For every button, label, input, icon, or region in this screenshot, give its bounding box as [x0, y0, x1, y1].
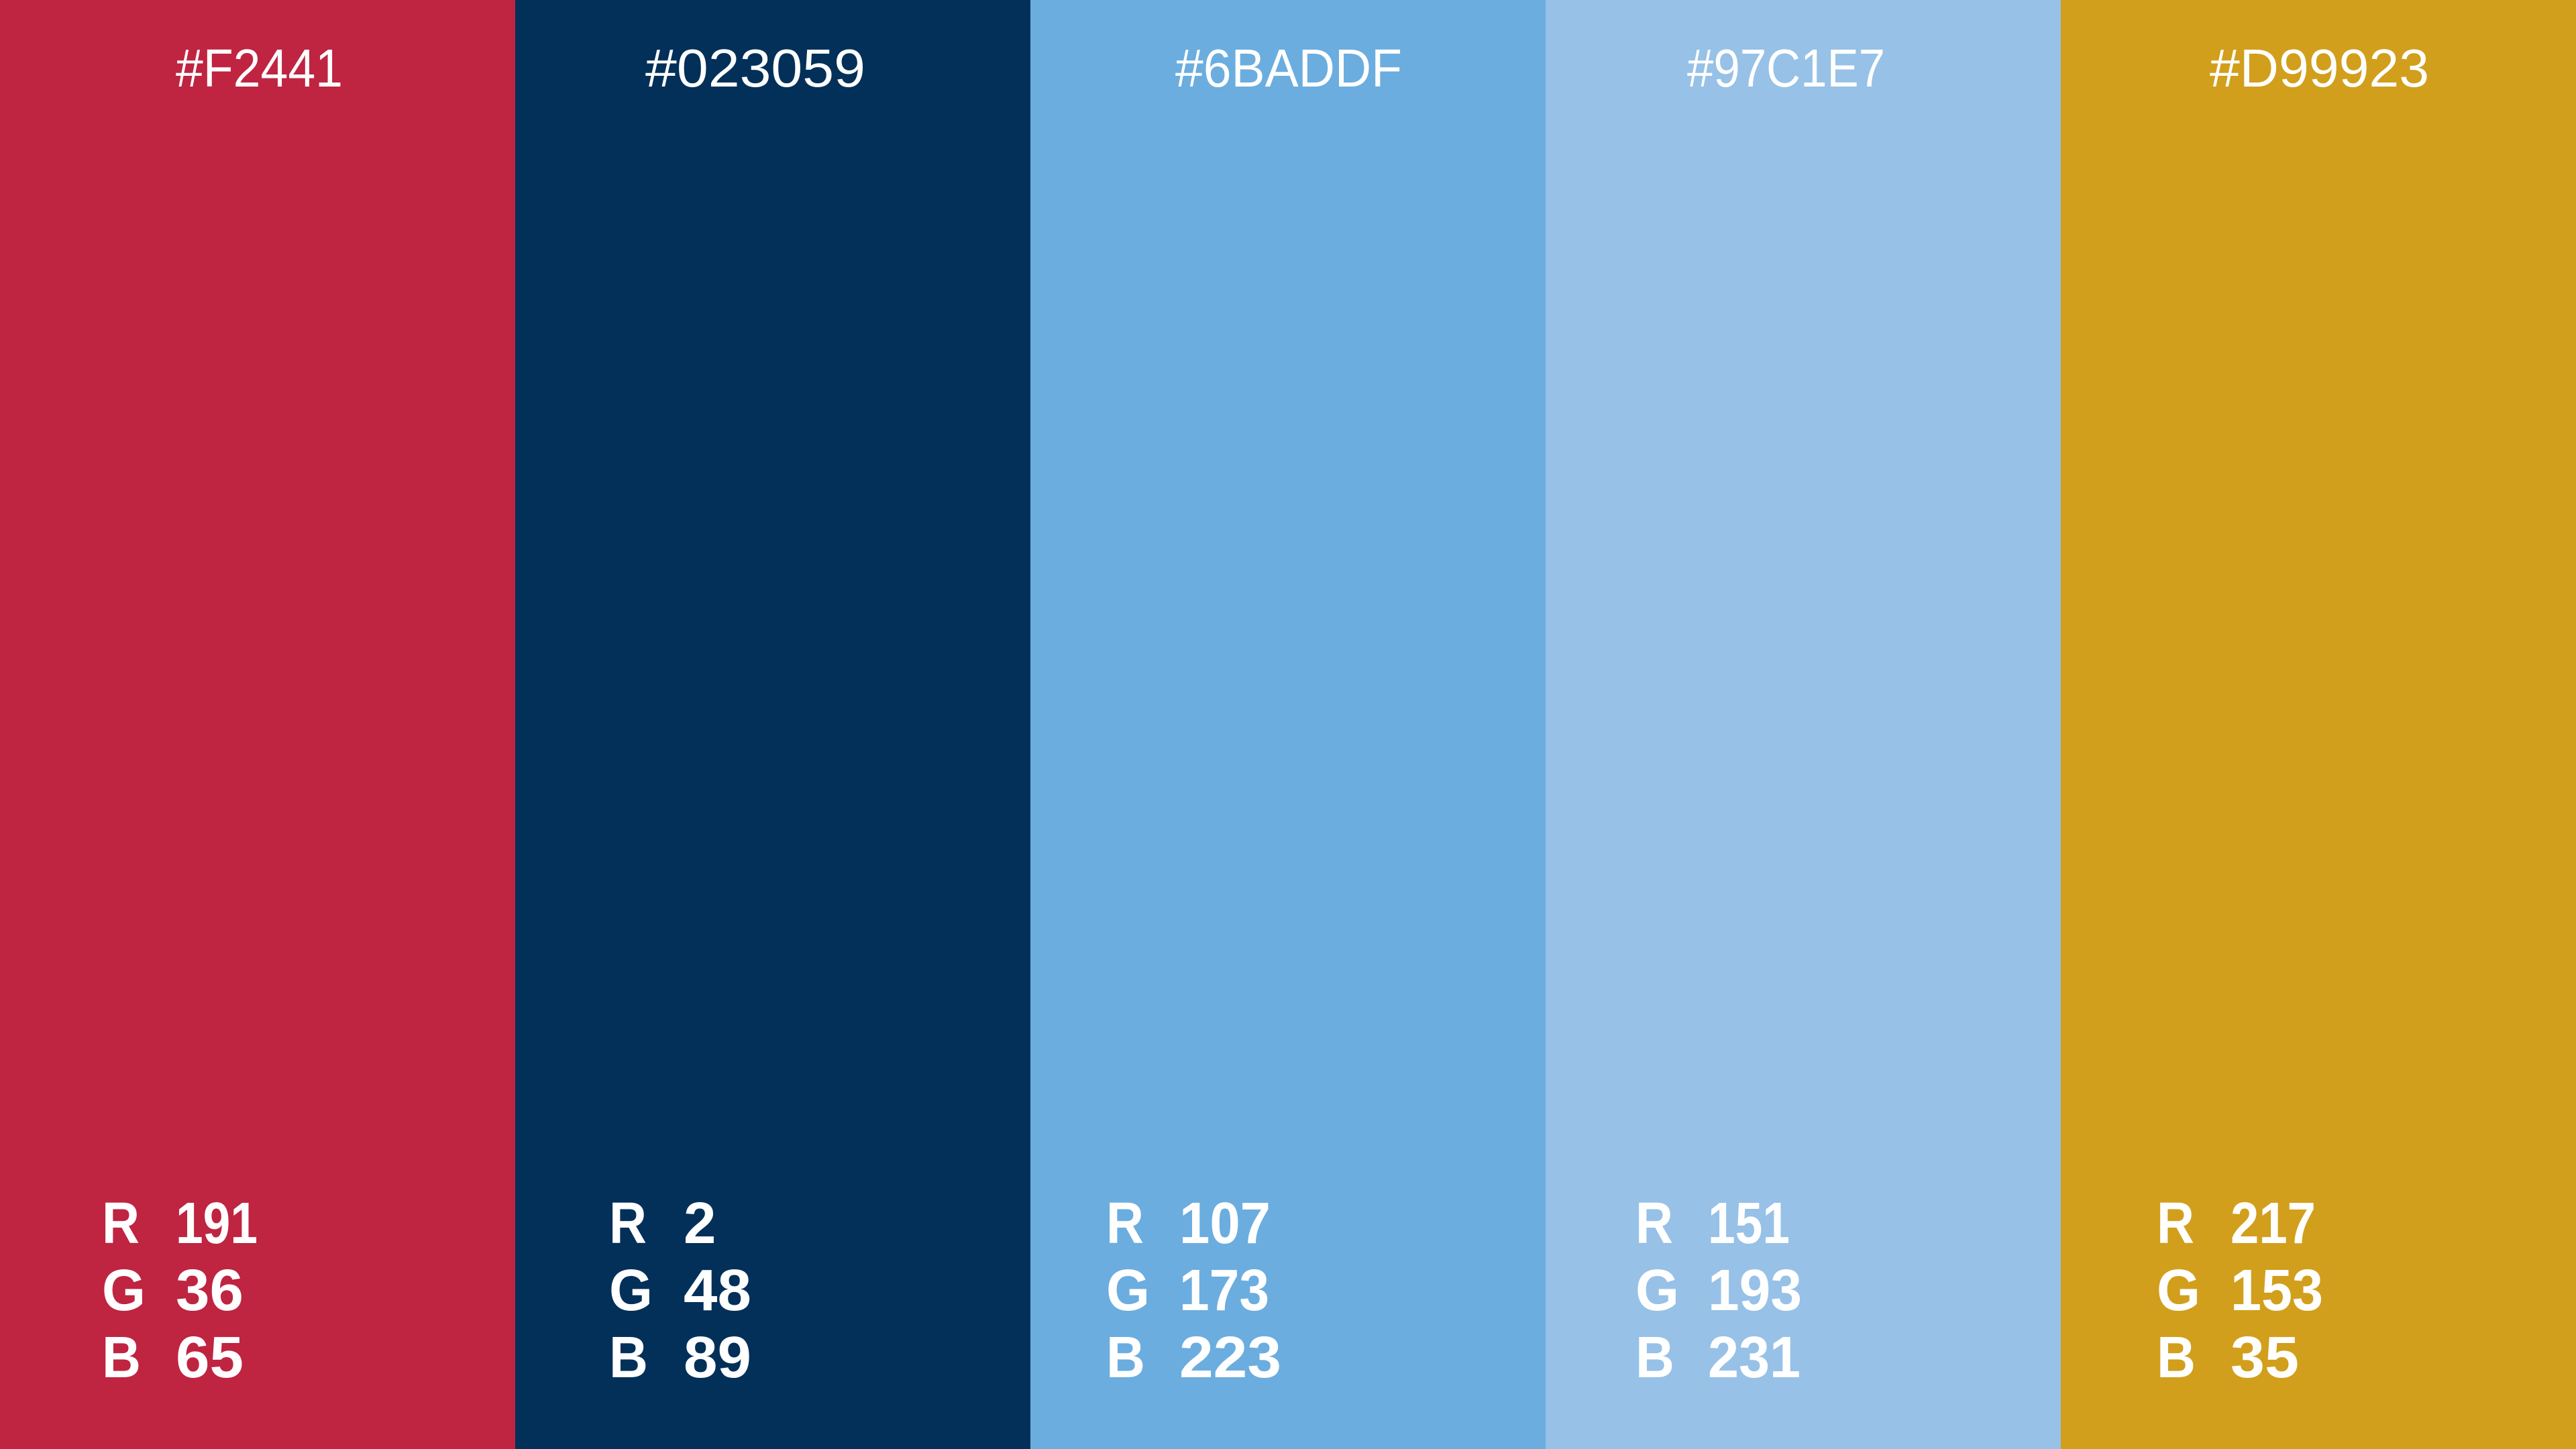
- text block: RGB values navy: 2: [684, 1191, 716, 1256]
- text block: RGB values light blue: B: [1635, 1325, 1674, 1390]
- heading: hex code D99923: #D99923: [2210, 38, 2429, 98]
- text block: RGB values gold: 35: [2231, 1325, 2299, 1390]
- text block: RGB values blue: 107: [1179, 1191, 1271, 1256]
- text block: RGB values gold: R: [2157, 1191, 2194, 1256]
- panel: swatch D99923: [2061, 0, 2576, 1449]
- heading: hex code 023059: #023059: [645, 38, 865, 98]
- text block: RGB values light blue: 193: [1708, 1258, 1802, 1323]
- text block: RGB values gold: G: [2157, 1258, 2200, 1323]
- text block: RGB values red: 65: [176, 1325, 244, 1390]
- text block: RGB values light blue: [1635, 1191, 1802, 1390]
- text block: RGB values blue: R: [1106, 1191, 1144, 1256]
- text block: RGB values navy: B: [609, 1325, 648, 1390]
- heading: hex code 6BADDF: #6BADDF: [1175, 38, 1402, 98]
- text block: RGB values light blue: 151: [1708, 1191, 1790, 1256]
- text block: RGB values blue: B: [1106, 1325, 1145, 1390]
- text block: RGB values red: G: [102, 1258, 146, 1323]
- panel: swatch 023059: [515, 0, 1030, 1449]
- panel: swatch F2441: [0, 0, 515, 1449]
- text block: RGB values blue: [1106, 1191, 1281, 1390]
- text block: RGB values red: [102, 1191, 258, 1390]
- text block: RGB values navy: [609, 1191, 751, 1390]
- text block: RGB values blue: 173: [1179, 1258, 1269, 1323]
- text block: RGB values navy: R: [609, 1191, 647, 1256]
- text block: RGB values light blue: R: [1635, 1191, 1673, 1256]
- text block: RGB values navy: 48: [684, 1258, 751, 1323]
- text block: RGB values gold: B: [2157, 1325, 2196, 1390]
- panel: swatch 97C1E7: [1546, 0, 2061, 1449]
- heading: hex code F2441: #F2441: [176, 38, 343, 98]
- heading: hex code 97C1E7: #97C1E7: [1687, 38, 1885, 98]
- text block: RGB values red: 191: [176, 1191, 258, 1256]
- text block: RGB values blue: 223: [1179, 1325, 1281, 1390]
- text block: RGB values navy: 89: [684, 1325, 751, 1390]
- panel: swatch 6BADDF: [1030, 0, 1546, 1449]
- text block: RGB values gold: 217: [2231, 1191, 2316, 1256]
- text block: RGB values light blue: G: [1635, 1258, 1679, 1323]
- text block: RGB values blue: G: [1106, 1258, 1150, 1323]
- text block: RGB values navy: G: [609, 1258, 653, 1323]
- text block: RGB values red: 36: [176, 1258, 244, 1323]
- text block: RGB values red: B: [102, 1325, 141, 1390]
- text block: RGB values gold: [2157, 1191, 2323, 1390]
- text block: RGB values light blue: 231: [1708, 1325, 1801, 1390]
- text block: RGB values red: R: [102, 1191, 140, 1256]
- text block: RGB values gold: 153: [2231, 1258, 2323, 1323]
